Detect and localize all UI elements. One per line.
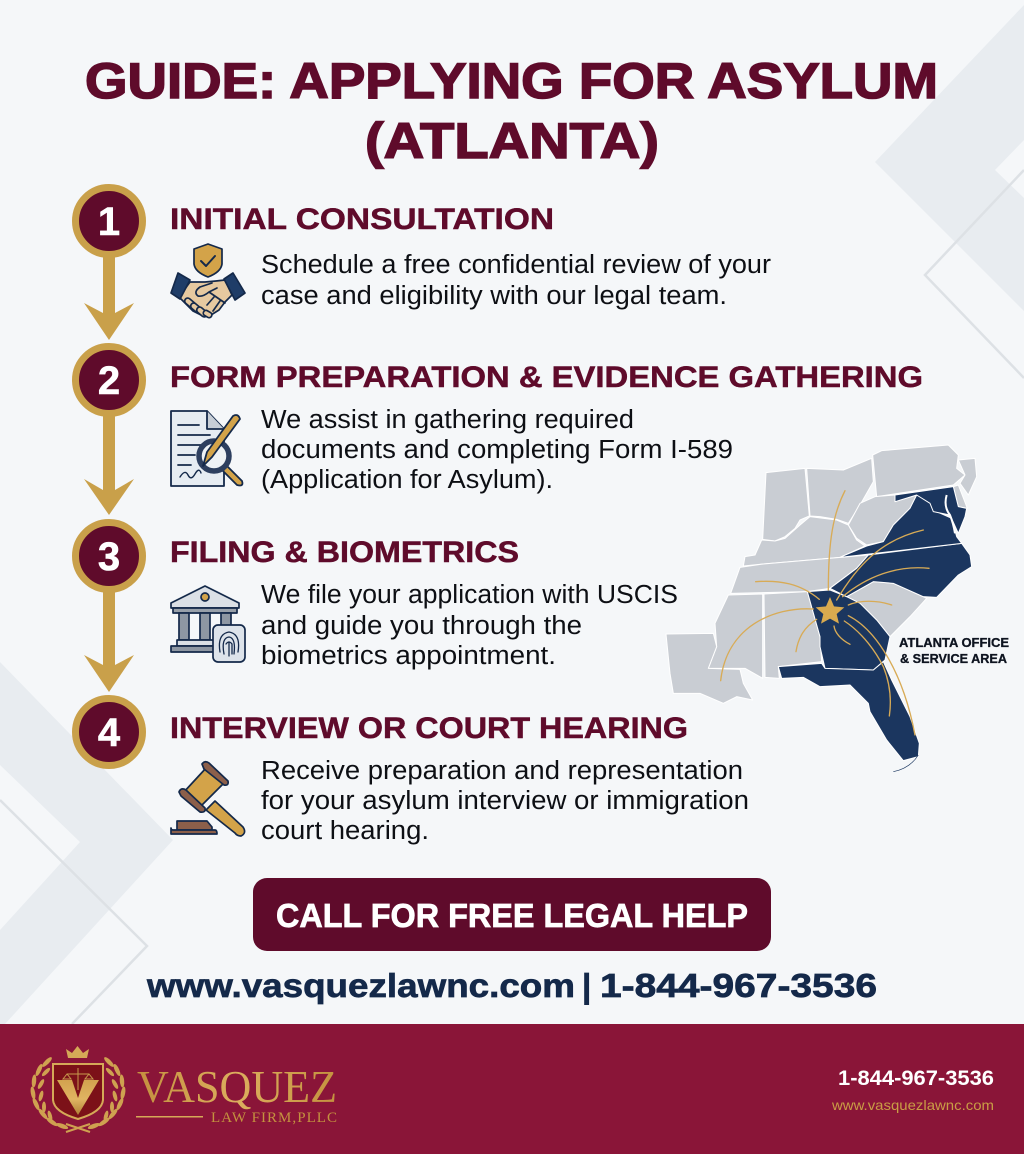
- step 2 text: documents and completing Form I-589: [261, 436, 733, 464]
- logo rule: [136, 1116, 203, 1118]
- logo subtitle: LAW FIRM,PLLC: [211, 1110, 337, 1126]
- step 3 text: [261, 581, 678, 670]
- step 2 text: (Application for Asylum).: [261, 466, 553, 494]
- call to action button: [253, 878, 771, 951]
- step 1 number badge: 1: [98, 200, 120, 244]
- arrow: step 1 to 2: [84, 250, 134, 340]
- step 2 heading: FORM PREPARATION & EVIDENCE GATHERING: [170, 361, 923, 394]
- map label: [899, 636, 1009, 666]
- navy service states: [778, 487, 972, 761]
- contact line: 1-844-967-3536: [600, 967, 877, 1004]
- step 2 number badge: 2: [98, 359, 120, 403]
- step 3 number badge: [76, 522, 142, 590]
- step 3 number badge: 3: [98, 535, 120, 579]
- step 2 text: We assist in gathering required: [261, 406, 634, 434]
- step 1 text: case and eligibility with our legal team.: [261, 282, 727, 310]
- logo V: [57, 1080, 99, 1115]
- step 1 text: [261, 251, 772, 310]
- step 3 text: and guide you through the: [261, 612, 582, 640]
- icon: star: [816, 597, 844, 624]
- step 3 text: We file your application with USCIS: [261, 581, 678, 609]
- step 4 number badge: 4: [98, 711, 121, 755]
- contact line: www.vasquezlawnc.com: [146, 967, 575, 1004]
- call to action button: CALL FOR FREE LEGAL HELP: [276, 897, 748, 934]
- step 3 text: biometrics appointment.: [261, 642, 556, 670]
- step 4 number badge: [76, 698, 142, 766]
- title: GUIDE: APPLYING FOR ASYLUM: [85, 53, 938, 109]
- gold routes: [721, 491, 929, 735]
- logo: [30, 1046, 337, 1132]
- step 2 number badge: [76, 346, 142, 414]
- icon: document with pen and magnifier: [171, 411, 242, 486]
- gray neighboring states: [666, 445, 977, 703]
- logo crown: [66, 1046, 89, 1058]
- arrow: step 3 to 4: [84, 586, 134, 692]
- contact line: [146, 967, 877, 1004]
- step 1 number badge: [76, 188, 142, 254]
- logo wordmark: VASQUEZ: [137, 1062, 337, 1112]
- step 2 text: [261, 406, 733, 494]
- footer website: www.vasquezlawnc.com: [831, 1097, 994, 1113]
- step 3 heading: FILING & BIOMETRICS: [170, 536, 519, 569]
- title: (ATLANTA): [365, 113, 659, 169]
- florida keys: [893, 755, 918, 772]
- step 1 text: Schedule a free confidential review of your: [261, 251, 772, 279]
- logo scales: [63, 1068, 93, 1090]
- footer band: [0, 1024, 1024, 1154]
- logo left laurel: [30, 1056, 69, 1130]
- map label: & SERVICE AREA: [900, 652, 1007, 666]
- contact line: |: [582, 967, 591, 1004]
- step 1 heading: INITIAL CONSULTATION: [170, 203, 554, 236]
- map: Atlanta service area: [666, 445, 977, 772]
- icon: courthouse with fingerprint: [171, 586, 245, 662]
- step 4 text: court hearing.: [261, 817, 429, 845]
- step 4 text: for your asylum interview or immigration: [261, 787, 749, 815]
- logo shield: [53, 1064, 103, 1119]
- map label: ATLANTA OFFICE: [899, 636, 1009, 650]
- step 4 heading: INTERVIEW OR COURT HEARING: [170, 712, 688, 745]
- icon: shield and handshake: [171, 244, 245, 319]
- logo ribbon: [66, 1124, 90, 1132]
- step 4 text: Receive preparation and representation: [261, 757, 743, 785]
- step 4 text: [261, 757, 749, 845]
- footer phone: 1-844-967-3536: [838, 1067, 994, 1090]
- arrow: step 2 to 3: [84, 410, 134, 515]
- title: [85, 53, 938, 169]
- chesapeake bay: [946, 495, 955, 533]
- icon: gavel: [171, 762, 245, 836]
- logo right laurel: [87, 1056, 126, 1130]
